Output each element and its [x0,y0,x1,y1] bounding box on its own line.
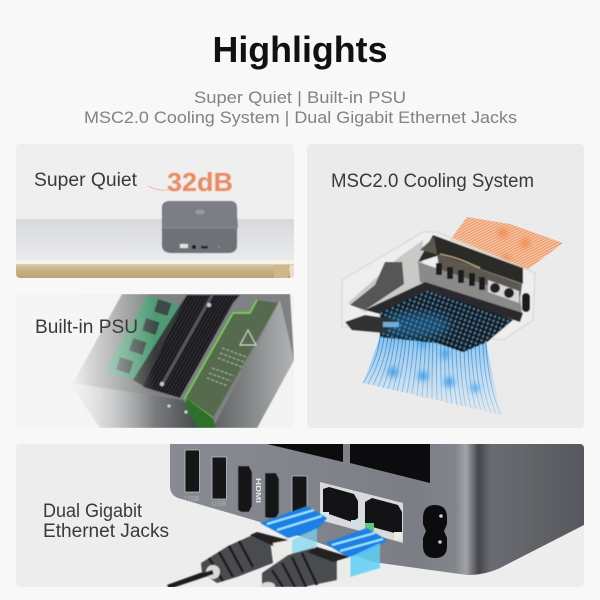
air vents [267,444,343,462]
panel: dual gigabit ethernet jacks [16,444,584,590]
hdmi ports [238,466,279,518]
icon: mini pc [162,201,238,253]
sound trail [148,186,172,190]
rear ports [418,262,522,313]
heading: built-in psu: Built-in PSU [35,317,138,338]
usb ports: USB [212,501,227,508]
table top [16,219,294,254]
rear vent section [418,235,523,284]
usb ports [185,450,227,508]
device body [170,444,584,575]
subtitle [84,89,517,127]
panel: msc2.0 cooling system [307,144,584,428]
psu green plate [185,300,278,418]
finned heat sink [380,290,513,352]
panel: built-in psu [16,294,294,428]
heading: ethernet [44,503,168,537]
cool air flow [363,337,501,415]
ethernet cables [168,532,350,590]
table wood edge [16,264,294,278]
subtitle: MSC2.0 Cooling System | Dual Gigabit Ethernet Jacks [84,109,517,127]
ethernet jacks [320,482,403,543]
heading: ethernet: Ethernet Jacks [43,521,169,542]
heatsink [143,295,240,398]
board edge [365,282,523,322]
power inlet [423,505,447,558]
heading: super quiet: Super Quiet [34,170,138,191]
hdmi ports: HDMI [254,478,263,503]
heading: ethernet: Dual Gigabit [43,501,143,522]
ram module [105,295,180,380]
device internals [72,294,294,428]
value: 32dB: 32dB [167,167,233,197]
usb ports: USB [185,496,200,503]
warning label [240,330,256,345]
light beams [260,506,387,577]
hot air flow [450,217,563,270]
title: Highlights [212,29,388,70]
usb-c style port [292,476,308,512]
subtitle: Super Quiet | Built-in PSU [194,89,406,107]
cutaway device [342,232,535,352]
heading: cooling: MSC2.0 Cooling System [331,171,534,192]
panel: super quiet [16,144,294,278]
